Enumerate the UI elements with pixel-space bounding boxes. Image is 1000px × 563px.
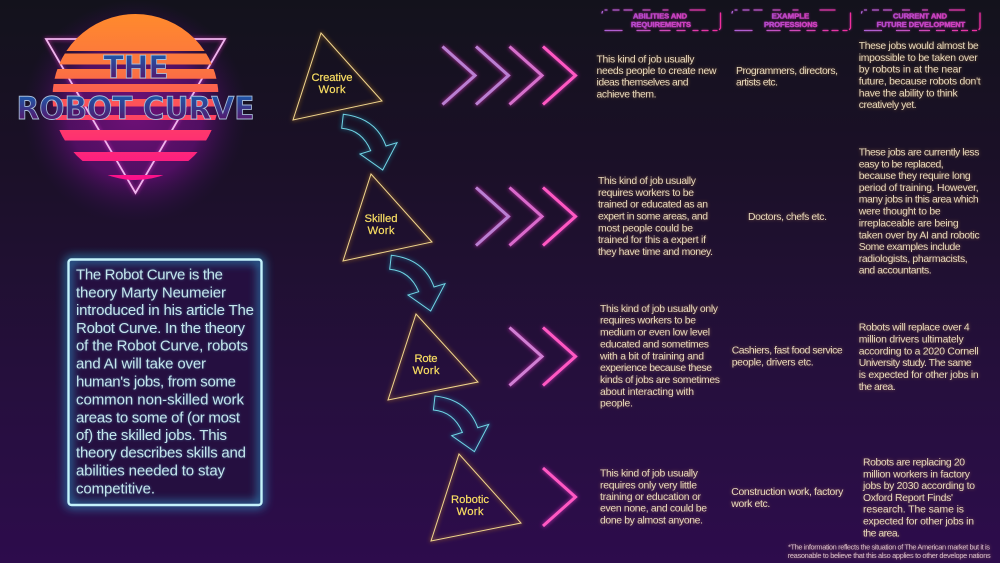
footnote: *The information reflects the situation of The American market but it is bbox=[788, 542, 990, 552]
row 2: abilities text: This kind of job usually bbox=[598, 176, 697, 187]
row 4: future text: research. The same is bbox=[863, 505, 964, 516]
description text: human's jobs, from some bbox=[76, 373, 236, 390]
logo triangle bbox=[46, 39, 225, 193]
row 3: abilities text: kinds of jobs are sometimes bbox=[600, 375, 720, 386]
row 3: abilities text: about interacting with bbox=[600, 387, 694, 398]
row 2: abilities text: trained or educated as an bbox=[598, 200, 708, 211]
triangle: rote work bbox=[388, 314, 478, 400]
row 4: abilities text: done by almost anyone. bbox=[600, 515, 703, 526]
triangle: robotic work: Work bbox=[456, 506, 484, 518]
row 3: abilities text: This kind of job usually only bbox=[600, 304, 719, 315]
row 1: professions text bbox=[736, 66, 838, 89]
triangle: skilled work: Skilled bbox=[364, 213, 398, 225]
footnote bbox=[788, 542, 991, 560]
triangle: skilled work: Work bbox=[368, 225, 395, 237]
retro striped sun bbox=[52, 14, 218, 180]
row 3: future text: million drivers ultimately bbox=[859, 335, 964, 346]
triangle: skilled work bbox=[343, 174, 432, 261]
footnote: reasonable to believe that this also applies to other develope nations bbox=[788, 551, 991, 560]
arrow: creative to skilled bbox=[342, 114, 397, 170]
row 4: abilities text: training or education or bbox=[600, 492, 702, 503]
triangle: robotic work: Robotic bbox=[451, 494, 489, 506]
row 1: abilities text: achieve them. bbox=[596, 89, 656, 100]
row 1: future text: have the ability to think bbox=[859, 88, 958, 99]
arrow: rote to robotic bbox=[433, 396, 489, 452]
row 2: abilities text: requires workers to be bbox=[598, 188, 694, 199]
row 3: abilities text: requires workers to be bbox=[600, 316, 696, 327]
row 2: future text: These jobs are currently less bbox=[859, 147, 979, 158]
header: abilities and requirements: REQUIREMENTS bbox=[631, 20, 691, 29]
row 1: abilities text: needs people to create new bbox=[596, 66, 717, 77]
row 3: future text: Robots will replace over 4 bbox=[859, 323, 970, 334]
row 1: future text: These jobs would almost be bbox=[859, 41, 979, 52]
row 4: future text: Robots are replacing 20 bbox=[863, 457, 965, 468]
header: example professions: EXAMPLE bbox=[772, 12, 809, 20]
description text: of the Robot Curve, robots bbox=[76, 338, 248, 355]
triangle: creative work bbox=[293, 33, 382, 120]
row 1: professions text: artists etc. bbox=[736, 78, 778, 89]
row 4: professions text bbox=[730, 487, 844, 510]
title: THE bbox=[104, 50, 168, 86]
description text: Robot Curve. In the theory bbox=[76, 320, 246, 337]
row 3: abilities text: experience because these bbox=[600, 363, 712, 374]
row 4: future text: the area. bbox=[863, 528, 900, 539]
row 3: abilities text: people. bbox=[600, 399, 633, 410]
row 1: professions text: Programmers, directors, bbox=[736, 66, 838, 77]
row 1: future text bbox=[859, 41, 981, 111]
row 1: future text: creatively yet. bbox=[859, 100, 917, 111]
description text bbox=[76, 266, 254, 497]
row 4: professions text: Construction work, factory bbox=[731, 487, 844, 498]
row 4: future text: expected for other jobs in bbox=[863, 516, 974, 527]
description text: of) the skilled jobs. This bbox=[76, 427, 227, 444]
row 1: abilities text bbox=[596, 54, 717, 100]
row 3: future text bbox=[859, 323, 979, 393]
chevrons: row 3 bbox=[510, 328, 576, 386]
row 3: future text: is expected for other jobs in bbox=[859, 370, 979, 381]
logo: sun, triangle and title bbox=[18, 9, 253, 212]
row 1: future text: impossible to be taken over bbox=[859, 53, 978, 64]
description text: competitive. bbox=[76, 480, 155, 497]
row 4: professions text: work etc. bbox=[730, 499, 770, 510]
row 1: abilities text: ideas themselves and bbox=[596, 78, 689, 89]
row 2: abilities text: they have time and money. bbox=[598, 247, 713, 258]
arrow: skilled to rote bbox=[390, 255, 445, 311]
description text: The Robot Curve is the bbox=[76, 266, 223, 283]
row 4: abilities text: even none, and could be bbox=[600, 504, 707, 515]
description text: common non-skilled work bbox=[76, 391, 244, 408]
row 2: future text: were thought to be bbox=[858, 207, 941, 218]
chevrons: row 4 bbox=[543, 468, 576, 526]
header: example professions: PROFESSIONS bbox=[764, 20, 818, 29]
row 2: future text: taken over by AI and robotic bbox=[859, 230, 980, 241]
description text: areas to some of (or most bbox=[76, 409, 241, 426]
row 4: future text: Oxford Report Finds' bbox=[863, 493, 953, 504]
row 4: future text: million workers in factory bbox=[863, 469, 971, 480]
row 4: abilities text bbox=[600, 468, 707, 526]
row 2: future text: period of training. However, bbox=[859, 183, 979, 194]
chevrons: row 2 bbox=[476, 188, 576, 246]
header: example professions bbox=[732, 10, 850, 30]
triangle: creative work: Work bbox=[318, 84, 346, 96]
triangle: rote work: Rote bbox=[414, 353, 438, 365]
triangle: robotic work bbox=[431, 454, 521, 541]
row 2: future text: irreplaceable are being bbox=[859, 218, 959, 229]
row 2: professions text: Doctors, chefs etc. bbox=[748, 212, 827, 223]
row 1: future text: future, because robots don't bbox=[859, 77, 981, 88]
header: current and future development: CURRENT AND bbox=[893, 12, 948, 20]
row 3: professions text bbox=[732, 345, 843, 368]
row 3: abilities text: educated and sometimes bbox=[600, 339, 709, 350]
description text: introduced in his article The bbox=[76, 302, 254, 319]
row 1: future text: by robots in at the near bbox=[859, 65, 962, 76]
row 3: abilities text: medium or even low level bbox=[600, 328, 710, 339]
triangle: rote work: Work bbox=[412, 365, 440, 377]
row 3: future text: the area. bbox=[859, 382, 896, 393]
row 1: abilities text: This kind of job usually bbox=[596, 54, 695, 65]
row 2: future text bbox=[858, 147, 980, 277]
triangle: creative work: Creative bbox=[312, 72, 352, 84]
chevrons: row 1 bbox=[442, 46, 576, 104]
description text: theory Marty Neumeier bbox=[76, 284, 226, 301]
row 3: abilities text: with a bit of training and bbox=[599, 351, 704, 362]
header: current and future development: FUTURE DEVELOPMENT bbox=[877, 20, 966, 29]
row 3: future text: according to a 2020 Cornell bbox=[859, 346, 979, 357]
row 4: abilities text: This kind of job usually bbox=[600, 468, 699, 479]
row 4: future text: jobs by 2030 according to bbox=[862, 481, 975, 492]
header: abilities and requirements bbox=[602, 10, 720, 30]
header: current and future development bbox=[862, 10, 980, 30]
row 2: abilities text: most people could be bbox=[598, 223, 693, 234]
row 3: abilities text bbox=[599, 304, 720, 410]
row 2: future text: easy to be replaced, bbox=[859, 159, 944, 170]
row 2: future text: because they require long bbox=[859, 171, 971, 182]
description text: theory describes skills and bbox=[76, 445, 246, 462]
row 3: professions text: Cashiers, fast food service bbox=[732, 345, 843, 356]
row 3: future text: University study. The same bbox=[859, 358, 972, 369]
row 4: future text bbox=[862, 457, 975, 539]
title bbox=[16, 50, 254, 127]
row 4: abilities text: requires only very little bbox=[600, 480, 697, 491]
row 2: future text: and accountants. bbox=[859, 266, 932, 277]
row 3: professions text: people, drivers etc. bbox=[732, 357, 814, 368]
description text: and AI will take over bbox=[76, 356, 206, 373]
row 2: abilities text: expert in some areas, and bbox=[598, 211, 708, 222]
header: abilities and requirements: ABILITIES AND bbox=[633, 12, 688, 20]
title: ROBOT CURVE bbox=[16, 91, 254, 127]
row 2: abilities text bbox=[598, 176, 713, 258]
row 2: future text: radiologists, pharmacists, bbox=[859, 254, 968, 265]
description panel bbox=[68, 260, 262, 505]
row 2: abilities text: trained for this a expert if bbox=[598, 235, 706, 246]
description text: abilities needed to stay bbox=[76, 463, 226, 480]
row 2: future text: Some examples include bbox=[859, 242, 961, 253]
row 2: future text: many jobs in this area which bbox=[859, 195, 979, 206]
